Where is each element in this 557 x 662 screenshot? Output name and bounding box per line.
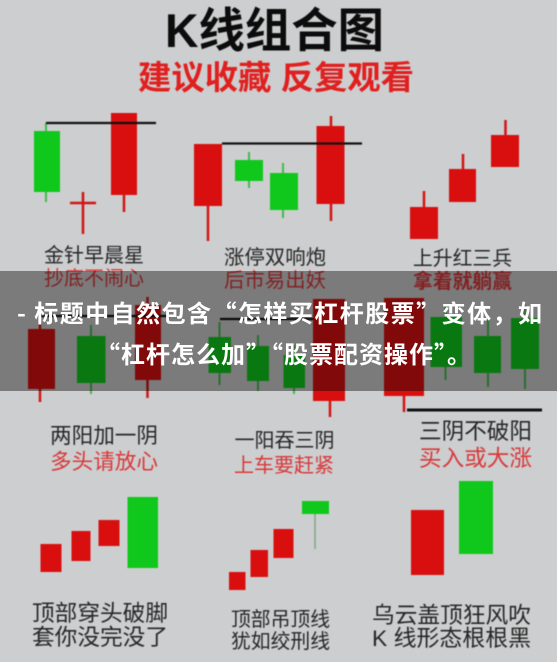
pattern: 乌云盖顶	[372, 481, 531, 651]
red note: 抄底不闹心	[44, 267, 144, 290]
caption line 1: - 标题中自然包含“怎样买杠杆股票”变体，如	[17, 294, 542, 329]
red note: 买入或大涨	[419, 446, 532, 471]
red note: 拿着就躺赢	[413, 269, 512, 293]
candlesticks	[40, 497, 158, 572]
label: 顶部吊顶线	[231, 608, 330, 631]
pattern: 两阳加一阴	[28, 297, 170, 474]
pattern: 上升红三兵	[410, 120, 519, 293]
caption line 2: “杠杆怎么加”“股票配资操作”。	[96, 335, 471, 370]
label: 金针早晨星	[44, 244, 144, 267]
pattern: 三阴不破阳	[384, 298, 542, 471]
overlay caption band	[0, 271, 557, 391]
label: 涨停双响炮	[224, 246, 326, 269]
label line 2: 犹如绞刑线	[231, 630, 330, 653]
red note: 后市易出妖	[224, 269, 326, 292]
label line 2: 套你没完没了	[32, 625, 168, 650]
red note: 上车要赶紧	[234, 454, 334, 477]
label: 三阴不破阳	[419, 419, 532, 444]
candlesticks	[208, 299, 345, 417]
label: 乌云盖顶狂风吹	[372, 603, 531, 628]
pattern: 顶部穿头破脚	[32, 497, 168, 650]
label: 上升红三兵	[413, 247, 512, 270]
label line 2: K 线形态根根黑	[372, 626, 531, 651]
red note: 多头请放心	[50, 450, 158, 474]
pattern: 金针早晨星	[34, 113, 156, 290]
label: 两阳加一阴	[50, 424, 158, 448]
pattern: 顶部吊顶线	[229, 501, 330, 653]
pattern: 一阳吞三阴	[208, 299, 345, 477]
candlesticks	[229, 501, 329, 590]
candlesticks	[410, 120, 519, 239]
candlesticks	[384, 298, 542, 412]
title: K线组合图	[165, 4, 384, 57]
candlesticks	[411, 481, 493, 575]
candlesticks	[28, 297, 170, 402]
pattern: 涨停双响炮	[194, 116, 362, 292]
candlesticks	[34, 113, 156, 234]
label: 一阳吞三阴	[234, 429, 334, 452]
candlesticks	[194, 116, 362, 241]
subtitle: 建议收藏 反复观看	[138, 59, 414, 96]
label: 顶部穿头破脚	[32, 601, 168, 626]
